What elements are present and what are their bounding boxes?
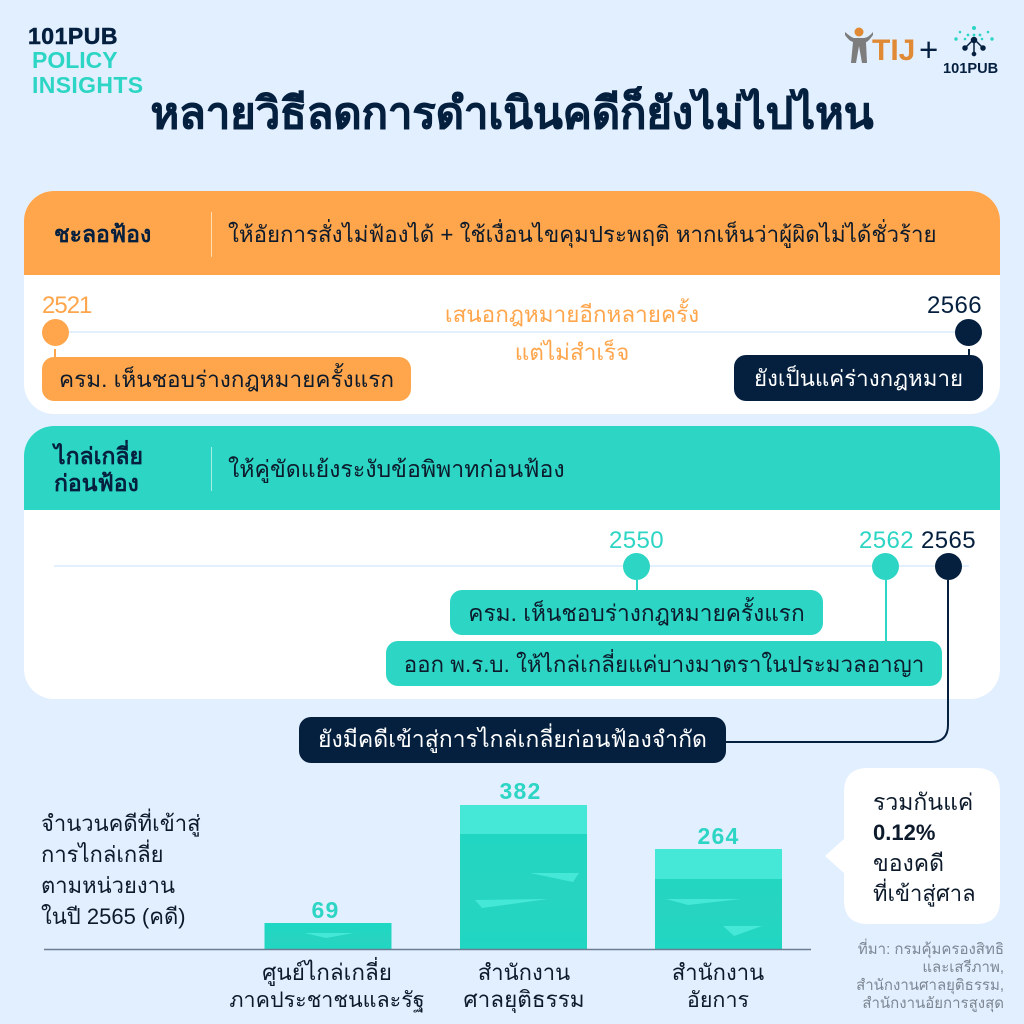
callout text: [873, 789, 976, 907]
label: act issued: ออก พ.ร.บ. ให้ไกล่เกลี่ยแค่บางมาตราในประมวลอาญา: [404, 652, 924, 676]
icon: 101PUB network: [954, 26, 994, 56]
connector to callout: [726, 580, 949, 743]
plus sign: +: [919, 31, 938, 68]
callout: 0.12%: [825, 768, 1000, 924]
callout: few cases: ยังมีคดีเข้าสู่การไกล่เกลี่ยก่อนฟ้องจำกัด: [318, 726, 707, 752]
axis labels: ศูนย์ไกล่เกลี่ย: [262, 956, 392, 986]
axis labels: ศาลยุติธรรม: [463, 987, 585, 1013]
101PUB small wordmark: 101PUB: [943, 61, 998, 77]
marker 2550: [623, 553, 650, 580]
callout text: ของคดี: [873, 850, 944, 876]
heading: [52, 440, 143, 496]
bar: 382: [460, 778, 587, 950]
icon: TIJ figure: [845, 28, 873, 63]
callout text: 0.12%: [873, 820, 935, 845]
axis labels: สำนักงาน: [672, 960, 764, 985]
marker 2562: [872, 553, 899, 580]
axis labels: อัยการ: [687, 988, 749, 1012]
bar: 382: 382: [500, 778, 541, 804]
logo: 101PUB Policy Insights: [28, 23, 143, 98]
title: หลายวิธีลดการดำเนินคดีก็ยังไม่ไปไหน: [150, 90, 874, 138]
logo line: 101PUB: 101PUB: [28, 23, 118, 49]
year 2521: 2521: [42, 292, 91, 319]
heading: ก่อนฟ้อง: [54, 470, 139, 496]
marker 2566: [955, 319, 982, 346]
year 2550: 2550: [609, 527, 664, 554]
axis: [44, 948, 811, 950]
marker 2565: [935, 553, 962, 580]
year 2562: 2562: [859, 527, 914, 554]
label: still a draft: ยังเป็นแค่ร่างกฎหมาย: [754, 366, 963, 391]
chart description: ตามหน่วยงาน: [41, 873, 175, 898]
description: ให้อัยการสั่งไม่ฟ้องได้ + ใช้เงื่อนไขคุมประพฤติ หากเห็นว่าผู้ผิดไม่ได้ชั่วร้าย: [228, 222, 937, 247]
panel: ไกล่เกลี่ยก่อนฟ้อง: [24, 426, 1000, 699]
bar chart: [44, 778, 811, 1013]
description: ให้คู่ขัดแย้งระงับข้อพิพาทก่อนฟ้อง: [228, 456, 565, 482]
bar: 69: 69: [312, 897, 339, 923]
heading: ชะลอฟ้อง: [54, 221, 151, 247]
panel header: [24, 191, 1000, 275]
label: still a draft: [734, 355, 983, 401]
year 2565: 2565: [921, 527, 976, 554]
note: repeated proposals: แต่ไม่สำเร็จ: [515, 340, 629, 365]
heading: ไกล่เกลี่ย: [54, 443, 143, 469]
logo line: INSIGHTS: INSIGHTS: [32, 72, 143, 98]
note: repeated proposals: [445, 298, 699, 365]
chart description: การไกล่เกลี่ย: [41, 842, 164, 867]
source note: สำนักงานศาลยุติธรรม,: [856, 977, 1004, 994]
partner logos: TIJ + 101PUB: [845, 26, 998, 77]
label: first draft: ครม. เห็นชอบร่างกฎหมายครั้งแรก: [59, 367, 394, 392]
chart description: จำนวนคดีที่เข้าสู่: [41, 811, 201, 836]
label: first approval: [450, 590, 823, 635]
label: first draft: [42, 357, 411, 401]
logo line: POLICY: POLICY: [32, 47, 118, 73]
panel header: [24, 426, 1000, 510]
chart description: ในปี 2565 (คดี): [41, 904, 186, 929]
source note: และเสรีภาพ,: [922, 959, 1004, 976]
axis labels: ภาคประชาชนและรัฐ: [229, 988, 425, 1013]
TIJ wordmark: TIJ: [872, 34, 915, 67]
label: first approval: ครม. เห็นชอบร่างกฎหมายครั้งแรก: [468, 600, 805, 626]
bar: 264: [655, 823, 782, 950]
axis labels: [229, 956, 764, 1013]
timeline: ไกล่เกลี่ยก่อนฟ้อง: [54, 527, 976, 763]
source note: [856, 938, 1004, 1012]
source note: ที่มา: กรมคุ้มครองสิทธิ: [858, 941, 1004, 958]
callout: few cases: [299, 717, 726, 763]
callout text: รวมกันแค่: [873, 789, 973, 815]
year 2566: 2566: [927, 292, 982, 319]
source note: สำนักงานอัยการสูงสุด: [862, 995, 1004, 1012]
label: act issued: [386, 641, 942, 686]
panel: ชะลอฟ้อง: [24, 191, 1000, 414]
note: repeated proposals: เสนอกฎหมายอีกหลายครั้ง: [445, 302, 699, 327]
bar: 264: 264: [698, 823, 739, 849]
chart description: [41, 808, 201, 929]
timeline: ชะลอฟ้อง: [42, 292, 983, 401]
callout text: ที่เข้าสู่ศาล: [873, 881, 976, 906]
marker 2521: [42, 319, 69, 346]
bar: 69: [264, 897, 392, 950]
axis labels: สำนักงาน: [478, 960, 570, 985]
